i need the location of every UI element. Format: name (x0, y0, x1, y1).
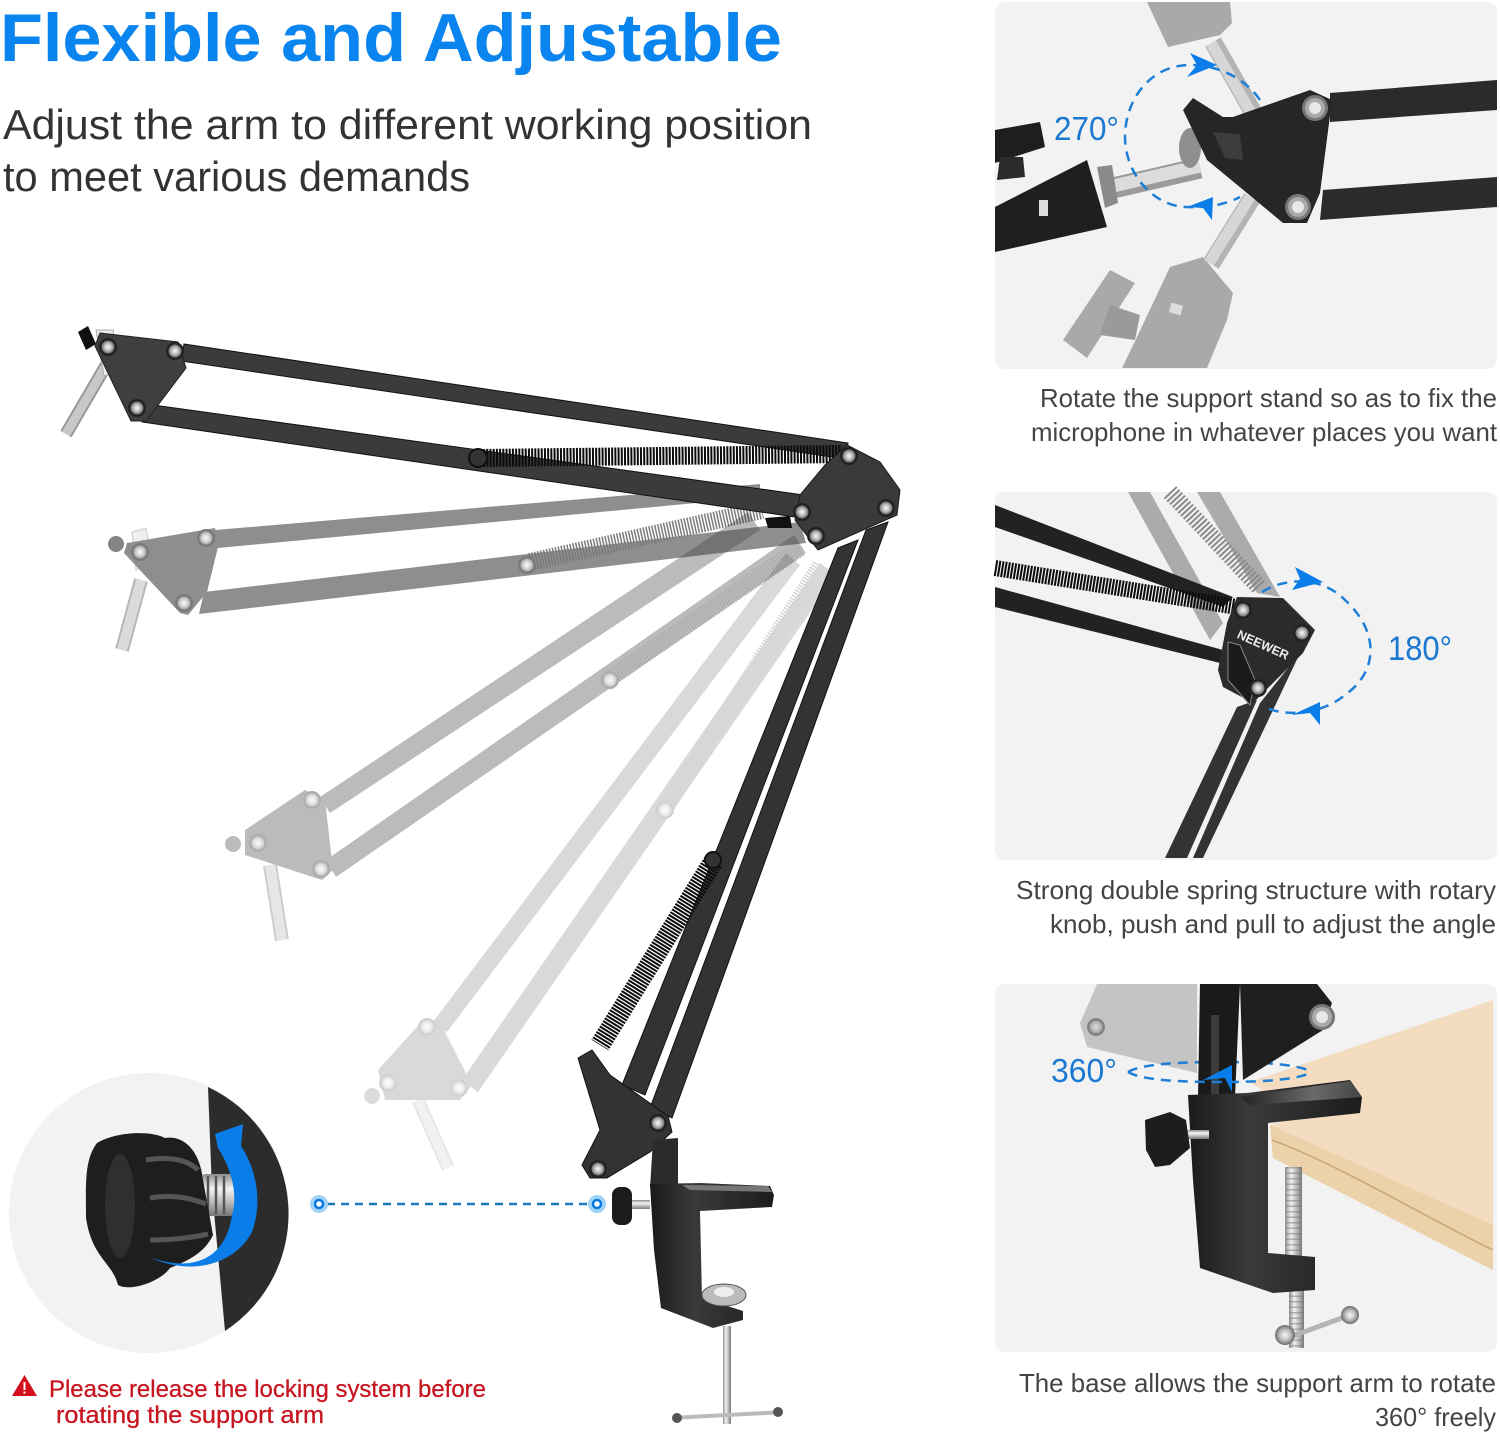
clamp screw and T handle (672, 1284, 783, 1424)
locking knob on clamp (612, 1187, 650, 1225)
blue dashed ellipse front and arrowhead (1128, 1065, 1312, 1092)
caption 2: knob, push and pull to adjust the angle (1050, 909, 1496, 939)
subtitle text: to meet various demands (3, 153, 470, 200)
locking knob (1228, 642, 1255, 705)
panel: 270 degree rotation: 270° (1054, 110, 1119, 147)
subtitle text: Adjust the arm to different working position (3, 101, 812, 148)
upper bar (181, 344, 848, 459)
panel: 180 degree elbow: 180° (1388, 630, 1452, 668)
blue dashed arc and arrowheads (1262, 567, 1371, 725)
locking tab (1213, 132, 1243, 160)
head plate (95, 333, 186, 421)
title: Flexible and Adjustable (0, 0, 782, 76)
T handle (1275, 1306, 1359, 1345)
blue dashed arc and arrowheads (1125, 53, 1260, 220)
table (1250, 1000, 1493, 1270)
lower plate (578, 1050, 672, 1178)
caption 1: microphone in whatever places you want (1031, 417, 1498, 447)
lower bar (142, 404, 804, 518)
caption 3: 360° freely (1375, 1402, 1496, 1432)
lower support arm bars (622, 522, 888, 1118)
icon: warning triangle (12, 1375, 37, 1396)
dashed connector (310, 1195, 606, 1213)
elbow plate (765, 445, 900, 550)
horizontal spring (469, 449, 842, 467)
ghost bars and spring (1128, 492, 1280, 640)
black left mount (995, 122, 1118, 252)
clamp (1188, 1080, 1362, 1293)
blue rotation arrow (149, 1124, 257, 1267)
threaded rod (1285, 1167, 1304, 1348)
caption 1: Rotate the support stand so as to fix the (1040, 383, 1497, 413)
panel: 360 degree base (995, 984, 1497, 1352)
black arm and tube (1198, 984, 1335, 1097)
black bars (995, 505, 1233, 607)
clamp post (650, 1138, 678, 1188)
knob (1145, 1112, 1209, 1167)
knob threaded stud (200, 1174, 236, 1216)
knob highlights (146, 1158, 208, 1240)
panel: 360 degree base: 360° (1051, 1052, 1117, 1089)
ghost arm pose 3 (225, 512, 806, 940)
ghost microphone mounts (1063, 2, 1233, 368)
dashed ellipse back half (1128, 1062, 1312, 1072)
caption 2 (1016, 875, 1496, 939)
caption 3: The base allows the support arm to rotate (1019, 1368, 1496, 1398)
subtitle text (3, 101, 812, 200)
clamp wedge (208, 1087, 289, 1331)
spring (995, 568, 1237, 607)
caption 3 (1019, 1368, 1496, 1432)
head plate (1183, 90, 1332, 223)
warning note (12, 1375, 486, 1429)
ghost arm pose 2 (108, 484, 806, 650)
desk clamp (650, 1183, 774, 1328)
warning note: Please release the locking system before (49, 1376, 486, 1403)
main arm (66, 326, 900, 1424)
knob body (86, 1133, 213, 1287)
warning note: rotating the support arm (56, 1402, 324, 1429)
head plate (1218, 597, 1315, 703)
logo: NEEWER (1235, 627, 1291, 663)
bars (1330, 80, 1497, 122)
inset circle: locking knob (9, 1073, 289, 1353)
mic screw and tip (66, 326, 120, 434)
caption 2: Strong double spring structure with rotary (1016, 875, 1496, 905)
caption 1 (1031, 383, 1498, 447)
vertical spring (600, 852, 721, 1045)
lower bars (1165, 700, 1257, 858)
silver rods (1113, 42, 1253, 264)
ghost arm pose 4 (364, 553, 836, 1168)
panel: 270 degree rotation (995, 2, 1497, 369)
ghost plate (1080, 984, 1197, 1073)
panel: 180 degree elbow (995, 492, 1497, 860)
